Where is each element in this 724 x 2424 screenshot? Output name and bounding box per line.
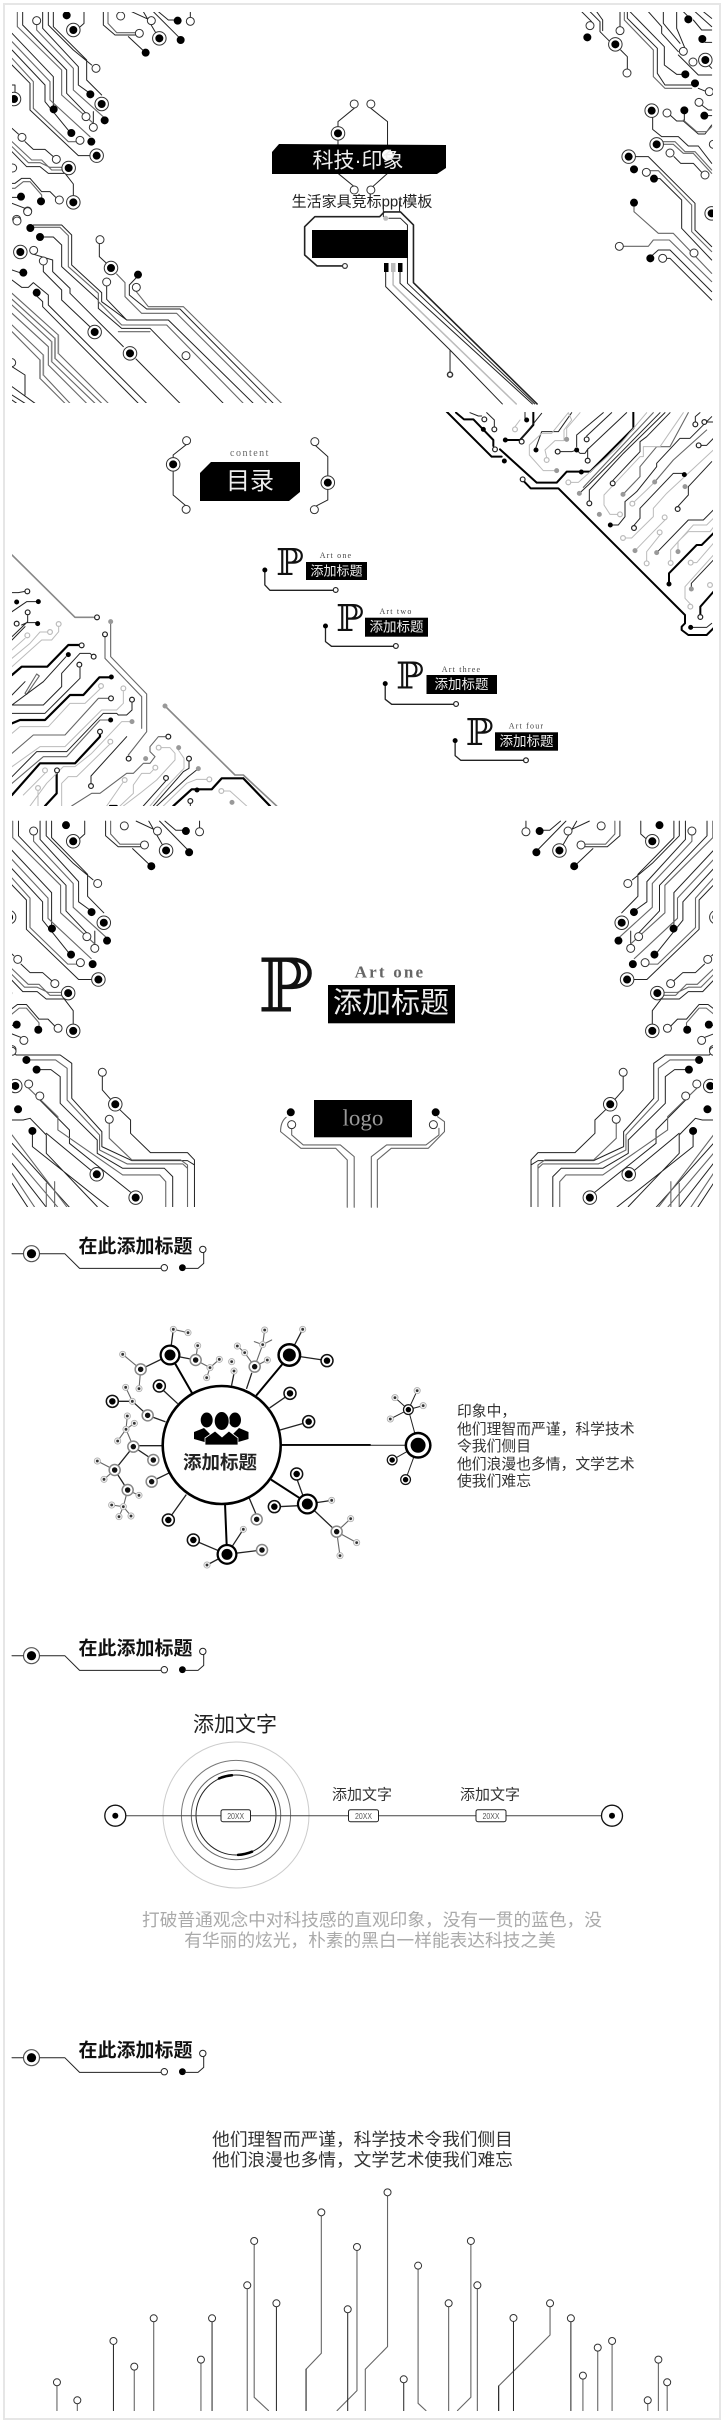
circuit art: section <box>7 821 719 1207</box>
circuit: right corner <box>582 12 713 300</box>
logo text: logo <box>343 1106 383 1130</box>
circuit: top connector rings <box>338 104 388 190</box>
date tag 1 <box>221 1810 250 1822</box>
black chip block <box>312 230 408 258</box>
item 3 <box>396 654 497 697</box>
contents title block <box>200 462 300 501</box>
item connector traces <box>265 570 526 760</box>
big letter P: ℙ <box>258 944 314 1030</box>
date tag 2 <box>348 1810 378 1822</box>
section header 2 <box>12 1637 206 1673</box>
timeline endpoint right <box>602 1805 622 1826</box>
panel: timeline <box>105 1714 623 1951</box>
circuit: top left <box>7 821 200 1050</box>
item 2: Art two <box>379 607 413 616</box>
item 1: ℙ <box>276 541 304 584</box>
timeline endpoint left <box>105 1805 126 1826</box>
logo block <box>314 1100 412 1137</box>
item 1 <box>276 541 367 584</box>
contents title: 目录 <box>226 468 274 495</box>
panel: section one <box>7 821 719 1207</box>
item 2: 添加标题 <box>370 620 424 635</box>
circuit: top left corner <box>12 12 190 219</box>
circuit: chip trace <box>305 202 537 404</box>
circuit art: contents <box>12 412 715 806</box>
right node cluster <box>282 1391 423 1480</box>
circuit skyline <box>57 2192 667 2411</box>
item 2 <box>336 597 428 640</box>
hub description: 使我们难忘 <box>457 1473 531 1490</box>
item 3: 添加标题 <box>434 677 488 692</box>
closing text: 他们浪漫也多情，文学艺术使我们难忘 <box>212 2150 513 2170</box>
chip terminals <box>384 263 402 272</box>
hub description: 他们浪漫也多情，文学艺术 <box>457 1456 635 1473</box>
date tag 1: 20XX <box>227 1812 245 1821</box>
timeline paragraph: 打破普通观念中对科技感的直观印象，没有一贯的蓝色，没 <box>142 1909 602 1930</box>
panel: contents <box>12 412 715 806</box>
hub network <box>97 1329 370 1565</box>
hub label: 添加标题 <box>183 1452 257 1473</box>
title banner <box>272 144 446 174</box>
section header 1 <box>12 1235 206 1271</box>
timeline focus rings <box>163 1742 309 1888</box>
timeline label 3: 添加文字 <box>460 1786 520 1804</box>
timeline heading: 添加文字 <box>193 1714 277 1736</box>
caption: content: content <box>230 448 270 459</box>
date tag 2: 20XX <box>355 1812 373 1821</box>
title connector rings <box>173 441 328 510</box>
circuit art: cover <box>12 12 713 403</box>
closing text: 他们理智而严谨，科学技术令我们侧目 <box>212 2129 513 2149</box>
item 4 <box>466 711 558 754</box>
panel: cover <box>12 12 713 404</box>
circuit: top right diagonal <box>447 412 715 635</box>
item 4: ℙ <box>466 711 494 754</box>
hub connectors <box>97 1329 370 1565</box>
item 2: ℙ <box>336 597 364 640</box>
item 3: Art three <box>442 665 481 674</box>
timeline axis <box>126 1815 602 1817</box>
icon: people <box>194 1412 248 1445</box>
hub description: 令我们侧目 <box>457 1438 531 1455</box>
title text: 科技·印象 <box>312 150 404 172</box>
section title block <box>328 985 455 1023</box>
item 4: 添加标题 <box>500 734 554 749</box>
circuit: bottom left corner <box>12 212 282 403</box>
timeline paragraph: 有华丽的炫光，朴素的黑白一样能表达科技之美 <box>184 1931 556 1951</box>
timeline paragraph <box>142 1909 602 1951</box>
circuit: bottom left <box>12 1051 194 1207</box>
hub nodes <box>97 1329 357 1565</box>
circuit: bottom right <box>531 1051 713 1207</box>
panel: closing <box>57 2129 667 2411</box>
item 1: Art one <box>320 551 352 560</box>
date tag 3 <box>476 1810 506 1822</box>
date tag 3: 20XX <box>482 1812 500 1821</box>
item 1: 添加标题 <box>310 564 363 578</box>
timeline label 2: 添加文字 <box>332 1786 392 1804</box>
central hub circle <box>163 1386 281 1504</box>
hub description: 他们理智而严谨，科学技术 <box>457 1420 635 1438</box>
hub description: 印象中， <box>457 1403 516 1420</box>
banner ring <box>382 149 394 161</box>
panel: hub diagram <box>97 1329 635 1565</box>
hub description <box>457 1403 635 1490</box>
item 4: Art four <box>509 722 544 730</box>
subtitle: 生活家具竞标ppt模板 <box>292 192 432 210</box>
label: Art one: Art one <box>355 962 425 982</box>
section header 3 <box>12 2039 206 2075</box>
item 3: ℙ <box>396 654 424 697</box>
section title: 添加标题 <box>333 986 449 1020</box>
circuit: top right <box>526 821 719 1050</box>
circuit: bottom left diagonal <box>12 555 277 806</box>
circuit: logo traces <box>281 1112 444 1207</box>
closing text <box>212 2129 513 2170</box>
